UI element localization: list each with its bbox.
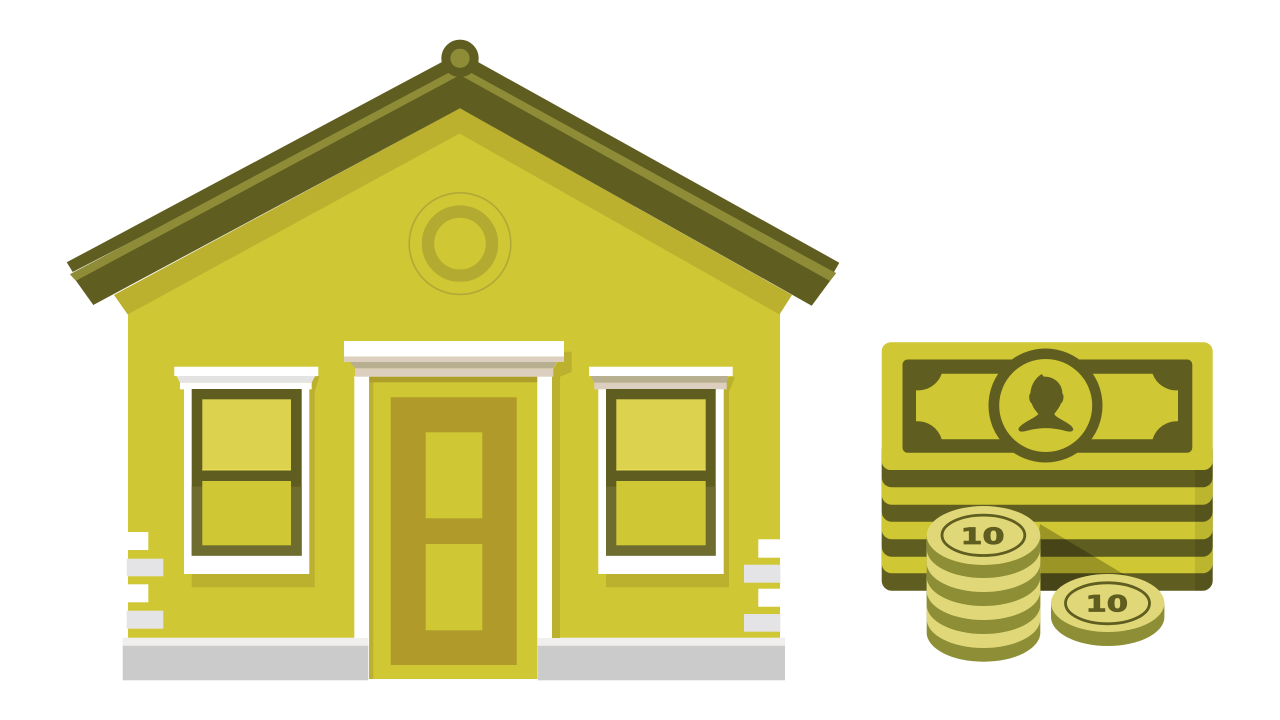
- door posts: [354, 376, 369, 638]
- stacked notes: [882, 440, 1213, 591]
- gable shadow band: [114, 108, 792, 314]
- banknote stack: [882, 342, 1213, 591]
- left foundation: [123, 638, 368, 680]
- single coin: [1051, 574, 1164, 646]
- wall: [128, 133, 780, 638]
- right wall bricks: [744, 539, 780, 632]
- stack side shade: [1195, 460, 1213, 591]
- icon: person bust: [1018, 374, 1073, 432]
- top note: [882, 342, 1213, 470]
- left window: [174, 367, 320, 587]
- house: [67, 40, 839, 680]
- door: [344, 341, 572, 679]
- roof highlight strip: [70, 67, 836, 281]
- roof: [67, 40, 839, 306]
- coin ring: [1066, 583, 1150, 624]
- coin ring: [942, 515, 1025, 556]
- round gable vent: [409, 193, 511, 294]
- coin cast shadow: [1030, 524, 1125, 591]
- coin face: [1051, 574, 1164, 632]
- coin value: 10: [960, 525, 1004, 550]
- door leaf: [391, 397, 517, 665]
- portrait medallion: [988, 348, 1102, 462]
- right foundation: [538, 638, 785, 680]
- porch cornice: [344, 341, 564, 377]
- coin edge: [1051, 603, 1164, 646]
- roof finial: [441, 40, 479, 77]
- coin value: 10: [1086, 593, 1128, 618]
- coin stack layers: [927, 506, 1040, 662]
- left wall bricks: [127, 532, 163, 629]
- coin stack: [927, 506, 1040, 662]
- right window: [589, 367, 735, 587]
